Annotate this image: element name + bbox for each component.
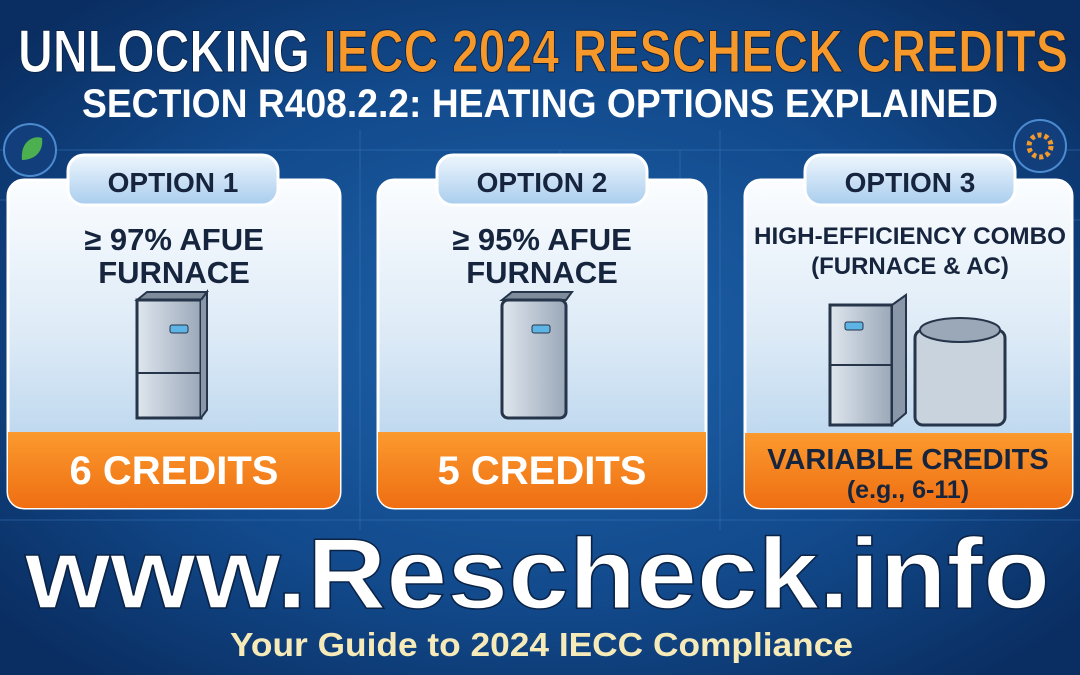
credits 2: 5 CREDITS xyxy=(438,449,646,493)
text: 95% AFUE: ≥ 95% AFUE xyxy=(452,222,632,257)
panel: option 2 xyxy=(378,155,706,508)
pill: option 2 xyxy=(437,155,647,205)
tagline: Your Guide to 2024 IECC Compliance xyxy=(230,626,853,663)
panel: option 3: (e.g., 6-11) xyxy=(847,476,969,504)
panel: option 1 xyxy=(8,155,340,508)
icon: furnace xyxy=(502,292,572,418)
icon: furnace xyxy=(137,292,207,418)
pill: option 3: OPTION 3 xyxy=(845,167,975,198)
panel: option 2: FURNACE xyxy=(466,255,618,290)
pill: option 1 xyxy=(68,155,278,205)
icon: furnace and AC xyxy=(830,295,1005,425)
credits 1: 6 CREDITS xyxy=(70,449,278,493)
icon: leaf xyxy=(4,124,56,176)
pill: option 3 xyxy=(805,155,1015,205)
icon: gear xyxy=(1014,120,1066,172)
pill: option 1: OPTION 1 xyxy=(108,167,238,198)
panel: option 3 xyxy=(745,155,1072,508)
text: combo: HIGH-EFFICIENCY COMBO xyxy=(754,223,1066,250)
pill: option 2: OPTION 2 xyxy=(477,167,607,198)
credits 3: VARIABLE CREDITS xyxy=(767,444,1049,476)
text: 97% AFUE: ≥ 97% AFUE xyxy=(84,222,264,257)
panel: option 1: FURNACE xyxy=(98,255,250,290)
url: www.Rescheck.info xyxy=(24,518,1050,630)
panel: option 3: (FURNACE & AC) xyxy=(811,253,1009,280)
subtitle: SECTION R408.2.2: HEATING OPTIONS EXPLAINED xyxy=(82,82,998,126)
